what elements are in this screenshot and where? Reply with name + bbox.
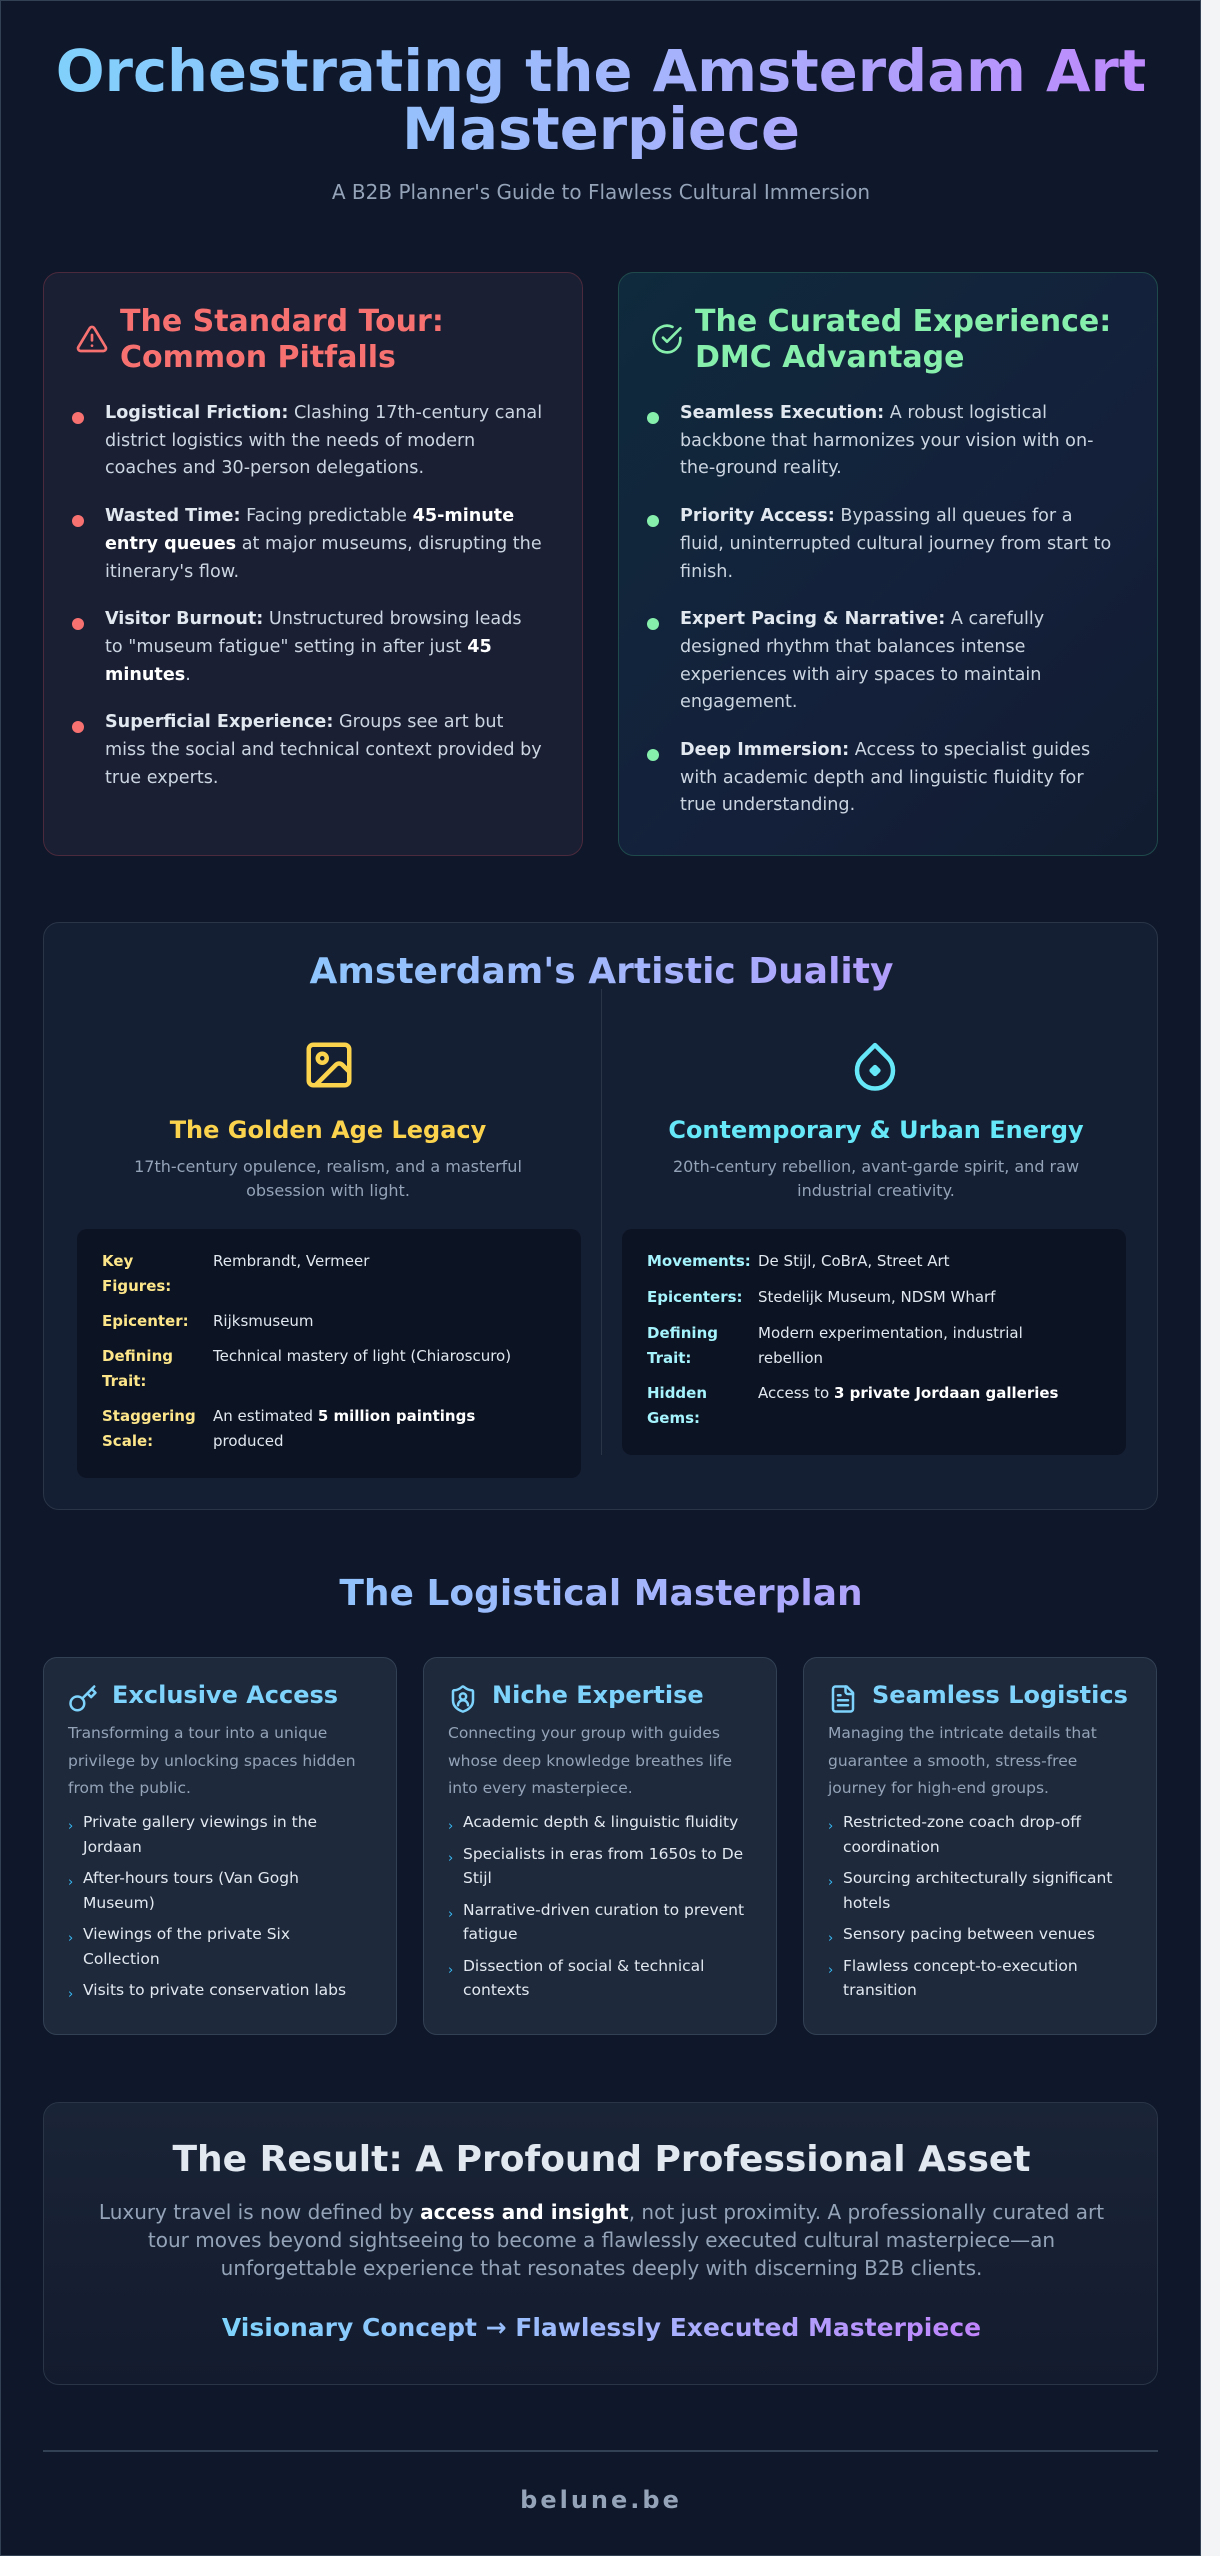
table: golden age: Figures: <box>102 1276 171 1294</box>
card: seamless logistics: Restricted-zone coach drop-off coordination <box>843 1813 1081 1856</box>
list: advantages <box>647 403 1111 815</box>
card: seamless logistics: Sourcing architecturally significant hotels <box>843 1869 1112 1912</box>
table: golden age: Technical mastery of light (Chiaroscuro) <box>213 1347 511 1365</box>
card: exclusive access <box>43 1657 397 2035</box>
table: golden age: Scale: <box>102 1432 153 1450</box>
card: exclusive access: Transforming a tour into a unique privilege by unlocking spaces hidden from the public. <box>68 1724 356 1797</box>
list: pitfalls <box>72 403 542 788</box>
heading: DMC advantage <box>695 304 1111 375</box>
panel: curated experience <box>618 272 1158 856</box>
text: contemporary desc: 20th-century rebellion, avant-garde spirit, and raw industrial creativity. <box>673 1157 1079 1200</box>
card: seamless logistics: Flawless concept-to-execution transition <box>843 1956 1078 1999</box>
card: seamless logistics: Managing the intricate details that guarantee a smooth, stress-free journey for high-end groups. <box>828 1724 1097 1797</box>
text: golden age desc: 17th-century opulence, realism, and a masterful obsession with light. <box>134 1157 522 1200</box>
table: golden age: Key <box>102 1252 133 1270</box>
table: contemporary: Gems: <box>647 1408 700 1426</box>
list: pitfalls: Superficial Experience: Groups see art but miss the social and technical context provided by true experts. <box>105 712 542 788</box>
panel: artistic duality <box>43 922 1158 1510</box>
icon: document <box>832 1685 854 1713</box>
table: golden age: An estimated 5 million paintings produced <box>213 1407 475 1450</box>
list: advantages: Deep Immersion: Access to specialist guides with academic depth and linguistic fluidity for true understanding. <box>680 740 1090 815</box>
heading: logistical masterplan <box>1 1573 1201 1614</box>
subhead: contemporary: Contemporary & Urban Energy <box>668 1116 1084 1144</box>
card: exclusive access: Exclusive Access <box>112 1681 338 1709</box>
heading: duality: Amsterdam's Artistic Duality <box>310 951 893 992</box>
icon: drop <box>854 1042 896 1091</box>
table: contemporary: Defining <box>647 1324 718 1342</box>
card: exclusive access: Viewings of the private Six Collection <box>83 1925 290 1968</box>
heading: DMC advantage: The Curated Experience: <box>695 304 1111 339</box>
text: result paragraph: Luxury travel is now defined by access and insight, not just proximity. A professionally curated art tour moves beyond sightseeing to become a flawlessly executed cultural masterpiece—an unforgettable experience that resonates deeply with discerning B2B clients. <box>99 2200 1104 2280</box>
card: seamless logistics: Seamless Logistics <box>872 1681 1128 1709</box>
card: niche expertise: Academic depth & linguistic fluidity <box>463 1813 738 1831</box>
table: contemporary: Movements: <box>647 1252 751 1270</box>
heading: pitfalls: Common Pitfalls <box>120 340 396 375</box>
heading: pitfalls: The Standard Tour: <box>120 304 444 339</box>
table: golden age: Defining <box>102 1347 173 1365</box>
icon: key <box>69 1685 97 1712</box>
table: contemporary: Epicenters: <box>647 1288 743 1306</box>
icon: warning <box>76 326 108 352</box>
table: golden age: Rembrandt, Vermeer <box>213 1252 369 1270</box>
title: Masterpiece <box>402 96 800 163</box>
tagline: Visionary Concept → Flawlessly Executed Masterpiece <box>222 2313 981 2342</box>
icon: image <box>306 1042 352 1088</box>
table: contemporary: Access to 3 private Jordaan galleries <box>758 1384 1058 1402</box>
icon: shield user <box>452 1685 474 1713</box>
heading: result: The Result: A Profound Professional Asset <box>172 2139 1031 2180</box>
panel: standard tour pitfalls <box>43 272 583 856</box>
table: contemporary: Trait: <box>647 1348 691 1366</box>
table: contemporary: Stedelijk Museum, NDSM Wharf <box>758 1288 995 1306</box>
list: advantages: Expert Pacing & Narrative: A carefully designed rhythm that balances intense experiences with airy spaces to maintain engagement. <box>680 609 1044 712</box>
card: exclusive access: Private gallery viewings in the Jordaan <box>83 1813 317 1856</box>
heading: logistical masterplan: The Logistical Masterplan <box>339 1573 863 1614</box>
list: pitfalls: Visitor Burnout: Unstructured browsing leads to "museum fatigue" setting in after just 45 minutes. <box>105 609 522 685</box>
list: pitfalls: Logistical Friction: Clashing 17th-century canal district logistics with the needs of modern coaches and 30-person delegations. <box>105 403 542 478</box>
table: golden age <box>77 1229 581 1478</box>
table: contemporary <box>622 1229 1126 1455</box>
card: exclusive access: Visits to private conservation labs <box>83 1981 346 1999</box>
table: golden age: Staggering <box>102 1407 196 1425</box>
card: niche expertise: Connecting your group with guides whose deep knowledge breathes life into every masterpiece. <box>448 1724 732 1797</box>
table: contemporary: De Stijl, CoBrA, Street Art <box>758 1252 950 1270</box>
card: niche expertise: Narrative-driven curation to prevent fatigue <box>463 1900 744 1943</box>
list: advantages: Priority Access: Bypassing all queues for a fluid, uninterrupted cultural journey from start to finish. <box>680 506 1111 582</box>
card: niche expertise <box>423 1657 777 2035</box>
list: advantages: Seamless Execution: A robust logistical backbone that harmonizes your vision with on-the-ground reality. <box>680 403 1093 478</box>
card: niche expertise: Dissection of social & technical contexts <box>463 1956 704 1999</box>
panel: result <box>43 2102 1158 2385</box>
title <box>1 43 1201 159</box>
card: niche expertise: Niche Expertise <box>492 1681 704 1709</box>
list: pitfalls: Wasted Time: Facing predictable 45-minute entry queues at major museums, disrupting the itinerary's flow. <box>105 506 542 582</box>
icon: check circle <box>652 324 682 354</box>
card: seamless logistics <box>803 1657 1157 2035</box>
heading: DMC advantage: DMC Advantage <box>695 340 964 375</box>
footer: belune.be <box>520 2486 682 2514</box>
card: seamless logistics: Sensory pacing between venues <box>843 1925 1095 1943</box>
table: golden age: Trait: <box>102 1372 146 1390</box>
table: golden age: Epicenter: <box>102 1312 189 1330</box>
heading: pitfalls <box>120 304 444 375</box>
card: exclusive access: After-hours tours (Van Gogh Museum) <box>83 1869 299 1912</box>
subtitle: A B2B Planner's Guide to Flawless Cultural Immersion <box>332 180 870 204</box>
heading: duality <box>44 951 1159 992</box>
title: Orchestrating the Amsterdam Art <box>56 38 1146 105</box>
table: contemporary: Hidden <box>647 1384 707 1402</box>
subhead: golden age: The Golden Age Legacy <box>170 1116 486 1144</box>
table: contemporary: Modern experimentation, industrial rebellion <box>758 1324 1023 1366</box>
table: golden age: Rijksmuseum <box>213 1312 314 1330</box>
card: niche expertise: Specialists in eras from 1650s to De Stijl <box>463 1844 743 1887</box>
